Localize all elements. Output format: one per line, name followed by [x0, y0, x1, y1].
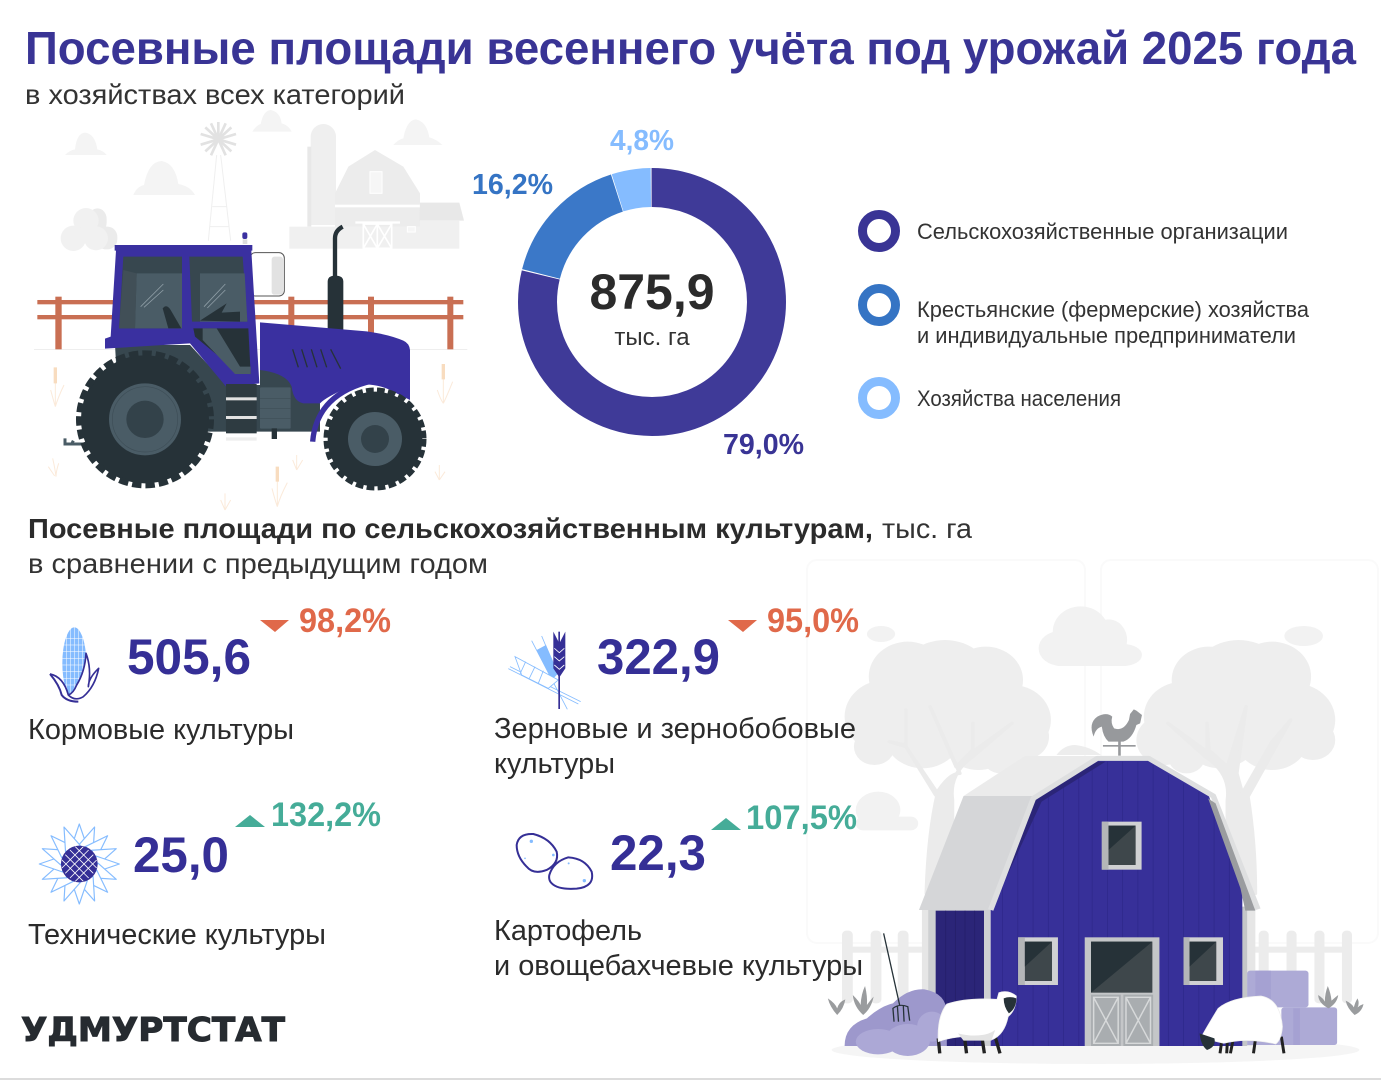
legend text: households: Хозяйства населения: [917, 386, 1121, 411]
fence: [37, 297, 463, 349]
exhaust pipe: [328, 227, 343, 330]
legend text: agricultural organisations: Сельскохозяйственные организации: [917, 219, 1288, 244]
icon: corn: [50, 627, 99, 702]
left tree: [845, 640, 1051, 893]
plants: [828, 986, 1363, 1015]
ground line: [34, 348, 467, 351]
crop: potatoes and vegetables: [494, 799, 863, 982]
right tree: [1056, 640, 1335, 893]
legend marker: agricultural organisations: [862, 214, 896, 248]
logo wordmark: УДМУРТСТАТ: [21, 1010, 286, 1049]
icon: wheat: [508, 632, 581, 709]
label: Зерновые и зернобобовые: [494, 713, 856, 745]
value: 25,0: [133, 827, 229, 883]
top window: [1102, 822, 1142, 870]
chassis: [115, 345, 320, 432]
change: 98,2%: [299, 602, 391, 640]
ground: [832, 1036, 1359, 1064]
hood: [260, 322, 410, 403]
steps: [226, 384, 291, 441]
clouds: [856, 606, 1323, 830]
label: Кормовые культуры: [28, 714, 294, 746]
rear wheel: [79, 354, 211, 485]
section heading: [28, 513, 972, 579]
illustration: tractor on a farm: [34, 110, 467, 510]
hitch: [65, 438, 83, 444]
title: Посевные площади весеннего учёта под урожай 2025 года: [25, 22, 1356, 74]
barn front wall: [991, 760, 1242, 1046]
weathervane rooster: [1092, 709, 1142, 756]
label: 4,8%: 4,8%: [610, 125, 674, 157]
barn side wall: [922, 910, 991, 1046]
legend text: farms: Крестьянские (фермерские) хозяйства: [917, 297, 1310, 322]
illustration: barn with sheep: [828, 606, 1363, 1064]
background farm: [61, 110, 464, 251]
value: 505,6: [127, 629, 251, 685]
legend text: farms: [917, 297, 1310, 348]
label: Технические культуры: [28, 919, 326, 951]
left window: [1018, 937, 1058, 985]
front wheel: [326, 390, 424, 488]
legend: [862, 214, 1310, 414]
picket fences: [842, 931, 1352, 1003]
change: 107,5%: [746, 799, 857, 837]
donut chart: [509, 159, 795, 445]
value: 22,3: [610, 825, 706, 881]
section heading: тыс. га: [882, 513, 972, 544]
right window: [1184, 937, 1223, 985]
label: и овощебахчевые культуры: [494, 950, 863, 982]
legend marker: farms: [862, 288, 896, 322]
down arrow: [260, 620, 289, 632]
crop: industrial: [28, 796, 381, 951]
label: 79,0%: 79,0%: [723, 429, 804, 461]
section heading: в сравнении с предыдущим годом: [28, 548, 488, 579]
label: 16,2%: 16,2%: [472, 169, 553, 201]
barn shade: [991, 762, 1106, 910]
change: 95,0%: [767, 602, 859, 640]
section heading: Посевные площади по сельскохозяйственным культурам,: [28, 513, 873, 544]
legend marker: households: [862, 382, 896, 414]
subtitle: в хозяйствах всех категорий: [25, 79, 405, 110]
wheat sprigs: [48, 364, 453, 510]
front fender: [313, 381, 373, 442]
left hay pile: [845, 989, 947, 1056]
up arrow: [235, 815, 265, 827]
beacon: [242, 232, 247, 244]
barn right trim: [1240, 907, 1255, 1046]
up arrow: [711, 818, 741, 830]
right sheep: [1200, 996, 1284, 1053]
barn roof trim: [991, 758, 1258, 910]
mirror: [250, 253, 284, 296]
hood vents: [293, 349, 341, 369]
donut total unit: тыс. га: [614, 324, 690, 351]
barn door: [1085, 937, 1159, 1046]
down arrow: [728, 620, 757, 632]
label: Картофель: [494, 915, 642, 947]
crop: fodder: [28, 602, 391, 746]
pitchfork: [884, 933, 910, 1022]
label: [494, 915, 863, 982]
label: [494, 713, 856, 780]
icon: sunflower: [39, 824, 119, 904]
barn planks: [1003, 762, 1229, 1046]
change: 132,2%: [271, 796, 381, 834]
left sheep: [938, 992, 1016, 1053]
cab windows: [119, 257, 251, 374]
cab: [105, 245, 259, 387]
right hay bales: [1247, 971, 1337, 1045]
value: 322,9: [597, 629, 720, 685]
crop: grain: [494, 602, 859, 780]
label: культуры: [494, 748, 615, 780]
donut total value: 875,9: [589, 264, 715, 320]
barn roof side: [964, 756, 1151, 796]
icon: potatoes: [517, 834, 592, 889]
legend text: farms: и индивидуальные предприниматели: [917, 323, 1296, 348]
